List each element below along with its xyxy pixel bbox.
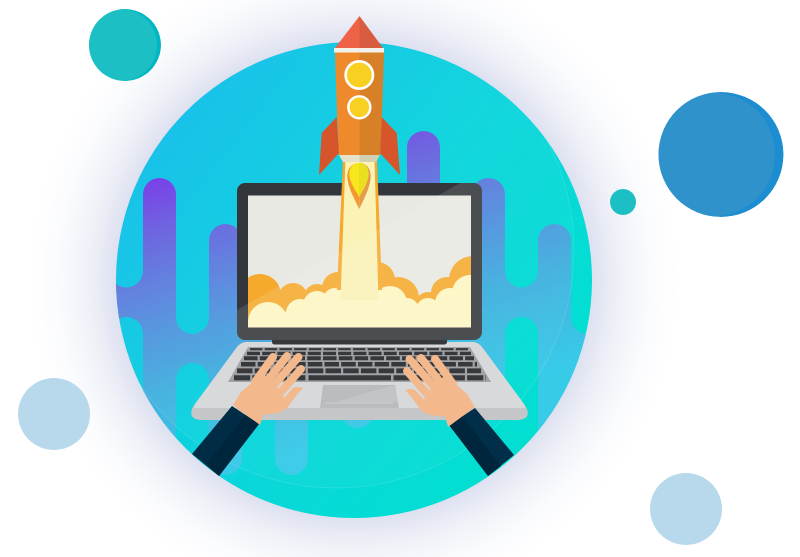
white band <box>334 48 384 52</box>
rocket body <box>335 52 360 155</box>
laptop lid <box>237 160 497 342</box>
trackpad <box>320 385 399 408</box>
keyboard well <box>228 347 491 382</box>
main gradient disc <box>116 42 592 518</box>
lower window <box>348 96 370 118</box>
display <box>248 196 471 328</box>
decorative circle: small teal <box>610 189 636 215</box>
right sleeve <box>449 408 514 476</box>
outer flame <box>347 163 371 209</box>
right hand <box>405 358 475 427</box>
laptop base <box>191 342 528 420</box>
nozzle <box>339 155 360 162</box>
rocket <box>319 16 400 209</box>
laptop hinge <box>272 340 447 344</box>
decorative circle: light blue bottom right <box>650 473 722 545</box>
left sleeve <box>192 406 259 476</box>
inner flame <box>349 163 369 197</box>
decorative circle: large blue <box>651 92 784 217</box>
keyboard keys <box>234 349 486 378</box>
decorative circle: top-left teal <box>85 9 161 81</box>
decorative circle: light blue left <box>18 378 90 450</box>
dripping purple-blue pattern <box>116 131 586 475</box>
left hand <box>233 356 303 425</box>
clouds on display <box>248 256 471 328</box>
upper window <box>346 61 373 89</box>
trackpad highlight <box>336 385 398 402</box>
inner offset circle overlay <box>140 142 574 488</box>
trackpad button line <box>326 402 393 404</box>
screen gloss <box>237 183 482 340</box>
left fin <box>319 117 339 175</box>
right fin <box>380 117 400 175</box>
exhaust column <box>337 160 382 300</box>
nose cone <box>335 16 360 48</box>
